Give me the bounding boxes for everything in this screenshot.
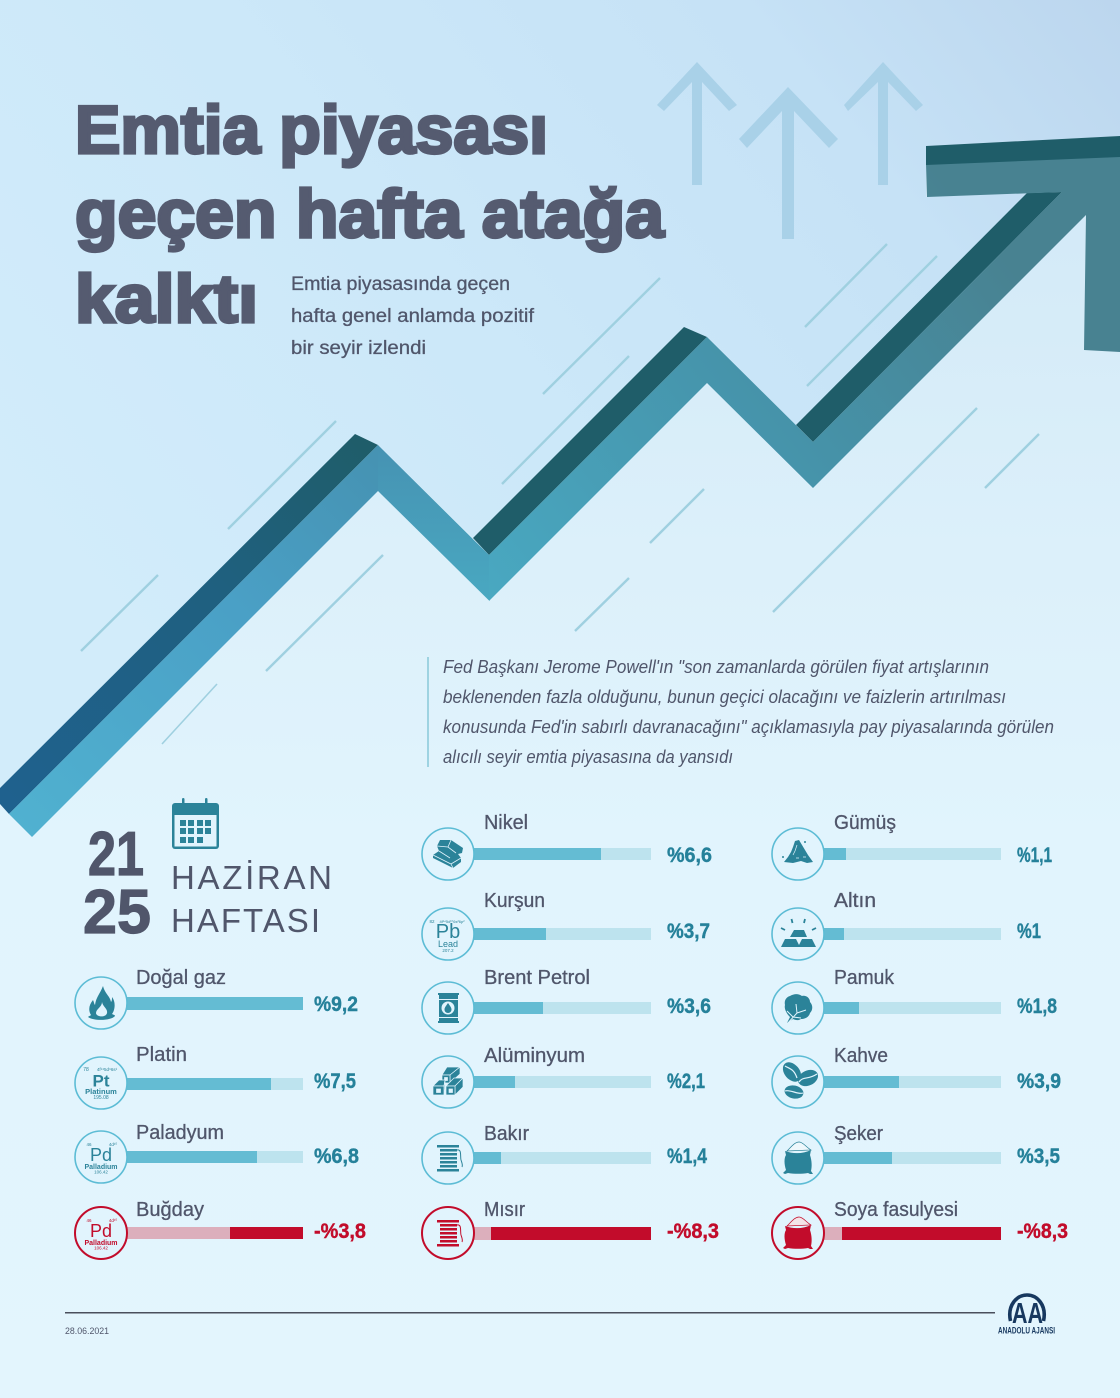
icon: red palladium element: 46 <box>86 1218 92 1223</box>
label: Nikel <box>484 812 528 834</box>
value: %7,5 <box>314 1070 356 1093</box>
value: %3,6 <box>667 995 711 1018</box>
icon: cotton <box>772 982 824 1034</box>
icon: palladium element: 4d¹⁰ <box>109 1142 117 1147</box>
bar <box>474 1152 651 1164</box>
label: Brent Petrol <box>484 967 590 989</box>
row: Şeker <box>772 1123 1060 1184</box>
bar <box>474 928 651 940</box>
bar <box>824 1152 1001 1164</box>
big rising arrow <box>0 136 1120 837</box>
value: -%8,3 <box>667 1220 719 1243</box>
icon: coffee beans <box>772 1056 824 1108</box>
icon: red palladium element: Pd <box>90 1221 112 1241</box>
row: Doğal gaz <box>75 967 358 1029</box>
row: Altın <box>772 890 1041 960</box>
bar <box>474 848 651 860</box>
label: Paladyum <box>136 1122 224 1144</box>
label: Şeker <box>834 1123 883 1145</box>
row: Gümüş <box>772 812 1052 880</box>
icon: red spool <box>422 1207 474 1259</box>
value: %6,6 <box>667 844 712 867</box>
subtitle: hafta genel anlamda pozitif <box>291 305 535 327</box>
subtitle: Emtia piyasasında geçen <box>291 273 510 295</box>
icon: lead element: Pb <box>436 921 460 943</box>
label: Doğal gaz <box>136 967 226 989</box>
icon: platinum element: 195.08 <box>93 1095 109 1101</box>
icon: palladium element <box>75 1131 127 1183</box>
date block: 21-25 Haziran haftası <box>83 798 332 947</box>
label: Soya fasulyesi <box>834 1199 958 1221</box>
icon: copper wire spool <box>422 1132 474 1184</box>
row: Kurşun <box>422 890 710 960</box>
bar <box>824 928 1001 940</box>
value: %1 <box>1017 920 1041 943</box>
row: Alüminyum <box>422 1045 705 1108</box>
date numbers <box>83 820 151 947</box>
label: Kurşun <box>484 890 545 912</box>
icon: lead element <box>422 908 474 960</box>
week label <box>171 859 332 939</box>
quote paragraph <box>428 657 1054 767</box>
subtitle <box>291 273 535 359</box>
icon: red sack <box>772 1207 824 1259</box>
icon: red palladium element: 106.42 <box>94 1246 108 1250</box>
label: Kahve <box>834 1045 888 1067</box>
row: Buğday <box>75 1199 366 1259</box>
bar <box>824 1076 1001 1088</box>
icon: silver ore pile <box>772 828 824 880</box>
icon: gold bars <box>772 908 824 960</box>
icon: lead element: 82 <box>429 919 435 924</box>
icon: red palladium element <box>75 1207 127 1259</box>
value: %1,4 <box>667 1145 707 1168</box>
icon: red palladium element: Palladium <box>84 1240 118 1247</box>
label: Platin <box>136 1044 187 1066</box>
bar <box>474 1227 651 1240</box>
value: %1,1 <box>1017 844 1052 867</box>
value: %2,1 <box>667 1070 705 1093</box>
bar <box>824 1002 1001 1014</box>
title <box>75 92 665 337</box>
label: Buğday <box>136 1199 204 1221</box>
icon: palladium element: Palladium <box>84 1164 118 1171</box>
value: %1,8 <box>1017 995 1057 1018</box>
speed lines <box>81 244 1039 744</box>
subtitle: bir seyir izlendi <box>291 337 426 359</box>
icon: lead element: 207.2 <box>442 948 454 953</box>
icon: oil barrel <box>422 982 474 1034</box>
bar <box>127 997 303 1010</box>
bar <box>474 1076 651 1088</box>
label: Gümüş <box>834 812 896 834</box>
row: Paladyum <box>75 1122 359 1183</box>
label: Bakır <box>484 1123 529 1145</box>
date numbers: 21 <box>88 820 144 889</box>
quote paragraph: beklenenden fazla olduğunu, bunun geçici olacağını ve faizlerin artırılması <box>443 687 1006 707</box>
title: Emtia piyasası <box>75 92 548 168</box>
label: Alüminyum <box>484 1045 585 1067</box>
icon: platinum element: 4f¹⁴5d⁹6s¹ <box>97 1067 118 1072</box>
label: Pamuk <box>834 967 895 989</box>
row: Bakır <box>422 1123 707 1184</box>
value: %6,8 <box>314 1145 359 1168</box>
bar <box>474 1002 651 1014</box>
row: Mısır <box>422 1199 719 1259</box>
title: geçen hafta atağa <box>75 176 665 252</box>
icon: palladium element: 106.42 <box>94 1170 108 1174</box>
icon: platinum element: 78 <box>83 1067 89 1073</box>
icon: aluminium profiles <box>422 1056 474 1108</box>
week label: HAZİRAN <box>171 859 332 896</box>
icon: platinum element: Platinum <box>85 1087 117 1096</box>
week label: HAFTASI <box>171 902 320 939</box>
icon: platinum element: Pt <box>92 1072 110 1090</box>
date numbers: 25 <box>83 878 151 947</box>
logo: Anadolu Ajansı: AA <box>1012 1298 1043 1330</box>
value: -%3,8 <box>314 1220 366 1243</box>
row: Nikel <box>422 812 712 880</box>
icon: metal ingots <box>422 828 474 880</box>
row: Kahve <box>772 1045 1061 1108</box>
row: Platin <box>75 1044 356 1109</box>
value: %3,7 <box>667 920 710 943</box>
logo: Anadolu Ajansı <box>998 1295 1055 1336</box>
icon: red palladium element: 4d¹⁰ <box>109 1218 117 1223</box>
value: %9,2 <box>314 993 358 1016</box>
bar <box>127 1151 303 1163</box>
icon: flame <box>75 977 127 1029</box>
logo: Anadolu Ajansı: ANADOLU AJANSI <box>998 1326 1055 1336</box>
bar <box>824 848 1001 860</box>
icon: lead element: 4f¹⁴5d¹⁰6s²6p² <box>439 919 465 924</box>
icon: platinum element <box>75 1057 127 1109</box>
quote paragraph: alıcılı seyir emtia piyasasına da yansıdı <box>443 747 733 767</box>
bar <box>127 1227 303 1239</box>
row: Pamuk <box>772 967 1057 1034</box>
row: Brent Petrol <box>422 967 711 1034</box>
footer rule and date: 28.06.2021 <box>65 1326 109 1337</box>
label: Mısır <box>484 1199 525 1221</box>
value: %3,9 <box>1017 1070 1061 1093</box>
label: Altın <box>834 890 876 912</box>
bar <box>824 1227 1001 1240</box>
quote paragraph: Fed Başkanı Jerome Powell'ın "son zamanlarda görülen fiyat artışlarının <box>443 657 989 677</box>
icon: calendar <box>172 798 219 849</box>
bar <box>127 1078 303 1090</box>
quote paragraph: konusunda Fed'in sabırlı davranacağını" açıklamasıyla pay piyasalarında görülen <box>443 717 1054 737</box>
icon: lead element: Lead <box>438 939 458 949</box>
value: %3,5 <box>1017 1145 1060 1168</box>
value: -%8,3 <box>1017 1220 1068 1243</box>
title: kalktı <box>75 261 258 337</box>
decorative ghost arrows <box>657 62 923 239</box>
row: Soya fasulyesi <box>772 1199 1068 1259</box>
icon: sugar sack <box>772 1132 824 1184</box>
icon: palladium element: Pd <box>90 1145 112 1165</box>
icon: palladium element: 46 <box>86 1142 92 1147</box>
